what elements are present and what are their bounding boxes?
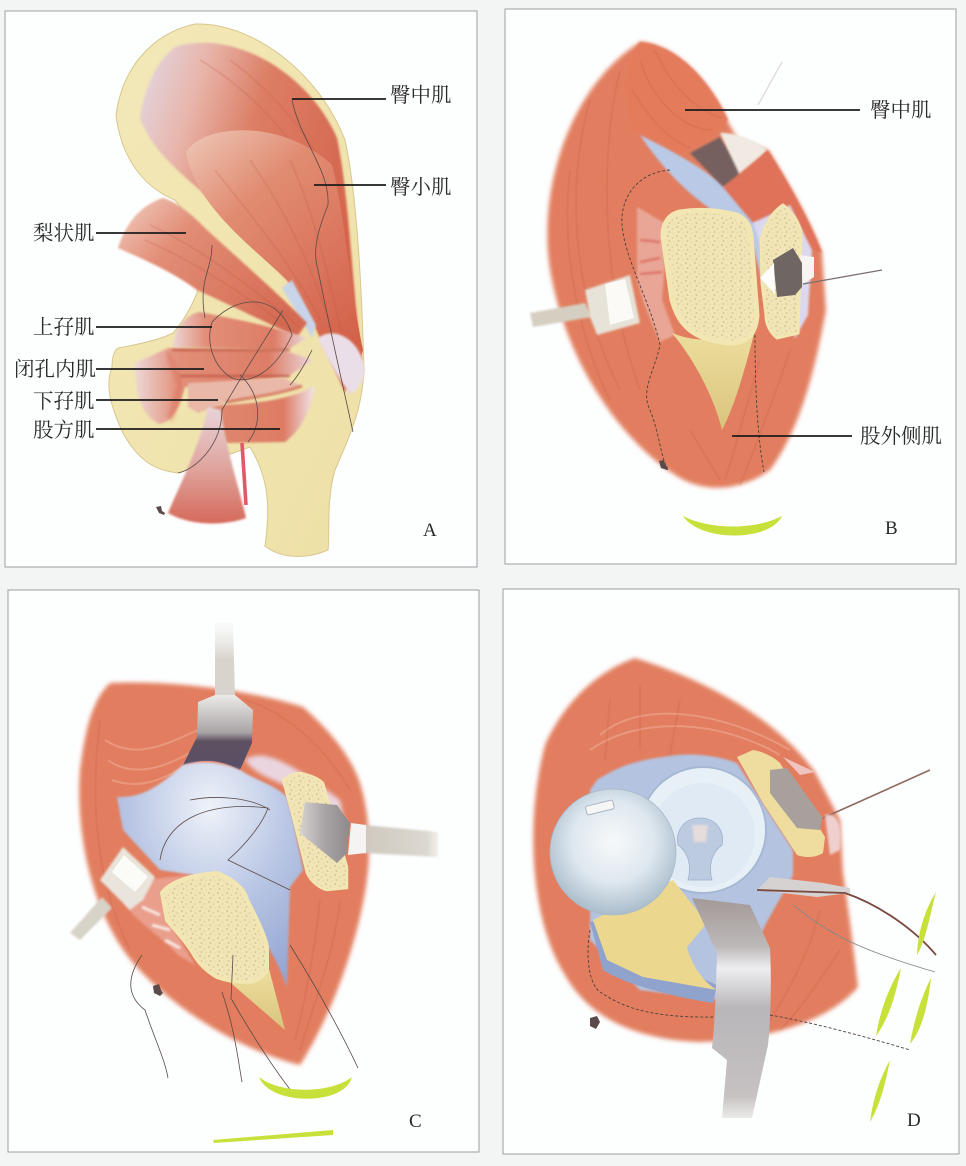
label D: D bbox=[907, 1110, 921, 1131]
labels A: 闭孔内肌 bbox=[14, 358, 96, 381]
femur rim D bbox=[590, 920, 717, 1003]
labels A: 上孖肌 bbox=[33, 316, 94, 339]
cup stem bbox=[677, 818, 723, 880]
labels A: A bbox=[423, 520, 437, 541]
leader lines B bbox=[685, 110, 860, 436]
outer muscle mass C bbox=[79, 682, 369, 1065]
panel B: femur exposed bbox=[505, 9, 956, 564]
suture lines D bbox=[588, 930, 910, 1050]
gluteus minimus muscle bbox=[186, 130, 363, 393]
yellow-green band C1 bbox=[259, 1077, 352, 1099]
femur shaft D bbox=[593, 880, 717, 990]
labels A: 臀中肌 bbox=[390, 84, 452, 107]
lavender capsule right B bbox=[753, 205, 812, 338]
gluteus medius fibres bbox=[200, 60, 358, 340]
yellow-green band C2 bbox=[213, 1130, 333, 1143]
quadratus femoris muscle bbox=[210, 386, 315, 443]
capsule patch A bbox=[282, 280, 316, 338]
labels A: 下孖肌 bbox=[33, 390, 94, 413]
right retractor D bbox=[757, 877, 936, 972]
small mark B bbox=[659, 460, 668, 470]
obturator internus muscle bbox=[135, 348, 313, 424]
femur section C bbox=[162, 873, 267, 982]
yellow-green marks D bbox=[870, 892, 936, 1122]
femoral neck bone B bbox=[672, 322, 757, 430]
small mark A bbox=[156, 506, 165, 515]
left retractor C bbox=[70, 847, 155, 940]
hamstring tendon bbox=[168, 407, 246, 523]
upper retractor B bbox=[690, 62, 782, 187]
labels A bbox=[14, 84, 452, 541]
piriformis muscle bbox=[118, 198, 307, 337]
panel A: posterior hip muscles bbox=[5, 11, 477, 567]
labels A: 股方肌 bbox=[33, 419, 94, 442]
large retractor D bbox=[692, 898, 771, 1118]
right retractor C bbox=[300, 802, 438, 863]
leader lines A bbox=[96, 99, 386, 429]
panel D: acetabulum exposed bbox=[503, 589, 959, 1154]
upper-right bone and retractor D bbox=[737, 750, 930, 857]
gluteus medius flap B bbox=[626, 42, 728, 155]
capsule strip B bbox=[640, 135, 764, 290]
panel C: capsule exposed bbox=[8, 590, 479, 1152]
muscle fibres B bbox=[567, 70, 790, 485]
piriformis fibres bbox=[145, 225, 300, 333]
gemellus inferior muscle bbox=[188, 378, 302, 413]
gluteus medius muscle bbox=[140, 43, 362, 392]
small mark D bbox=[590, 1016, 600, 1029]
labels B: 臀中肌 bbox=[870, 99, 932, 122]
capsule C bbox=[117, 762, 303, 987]
acetabular cup D bbox=[640, 767, 766, 893]
tendon end A bbox=[318, 333, 365, 394]
prosthetic femoral head D bbox=[550, 789, 676, 915]
nerve outlines A bbox=[292, 100, 353, 432]
femur neck C bbox=[225, 965, 285, 1030]
acetabular section C bbox=[283, 773, 347, 890]
acetabulum capsule D bbox=[590, 755, 793, 1000]
labels A: 梨状肌 bbox=[33, 222, 94, 245]
rotator stubs C bbox=[125, 875, 195, 965]
sciatic vessel bbox=[242, 443, 246, 505]
gluteus minimus fibres bbox=[215, 160, 345, 350]
labels B: 股外侧肌 bbox=[860, 425, 942, 448]
outlines B bbox=[622, 170, 670, 470]
right muscle B bbox=[723, 150, 822, 253]
upper muscle fibres D bbox=[590, 714, 790, 755]
pelvis and femur bone bbox=[109, 24, 364, 556]
capsule incision C bbox=[160, 797, 290, 890]
muscle fibres C bbox=[105, 730, 198, 784]
small mark C bbox=[153, 984, 163, 996]
outer muscle mass B bbox=[547, 42, 826, 488]
femur cut section B bbox=[663, 210, 757, 343]
outer muscle mass D bbox=[533, 658, 858, 1042]
labels B bbox=[860, 99, 942, 539]
labels A: 臀小肌 bbox=[390, 176, 452, 199]
outlines C bbox=[131, 955, 168, 1078]
right retractor B bbox=[760, 248, 882, 297]
upper retractor C bbox=[183, 622, 253, 770]
labels B: B bbox=[885, 518, 898, 539]
left retractor B bbox=[530, 275, 640, 335]
pink flap D bbox=[783, 757, 815, 775]
label C: C bbox=[409, 1111, 422, 1132]
yellow-green band B bbox=[683, 516, 782, 536]
gemellus superior muscle bbox=[172, 312, 307, 350]
rotator stubs left B bbox=[637, 207, 675, 342]
pink tissue C bbox=[245, 756, 345, 825]
acetabular section B bbox=[761, 205, 801, 338]
